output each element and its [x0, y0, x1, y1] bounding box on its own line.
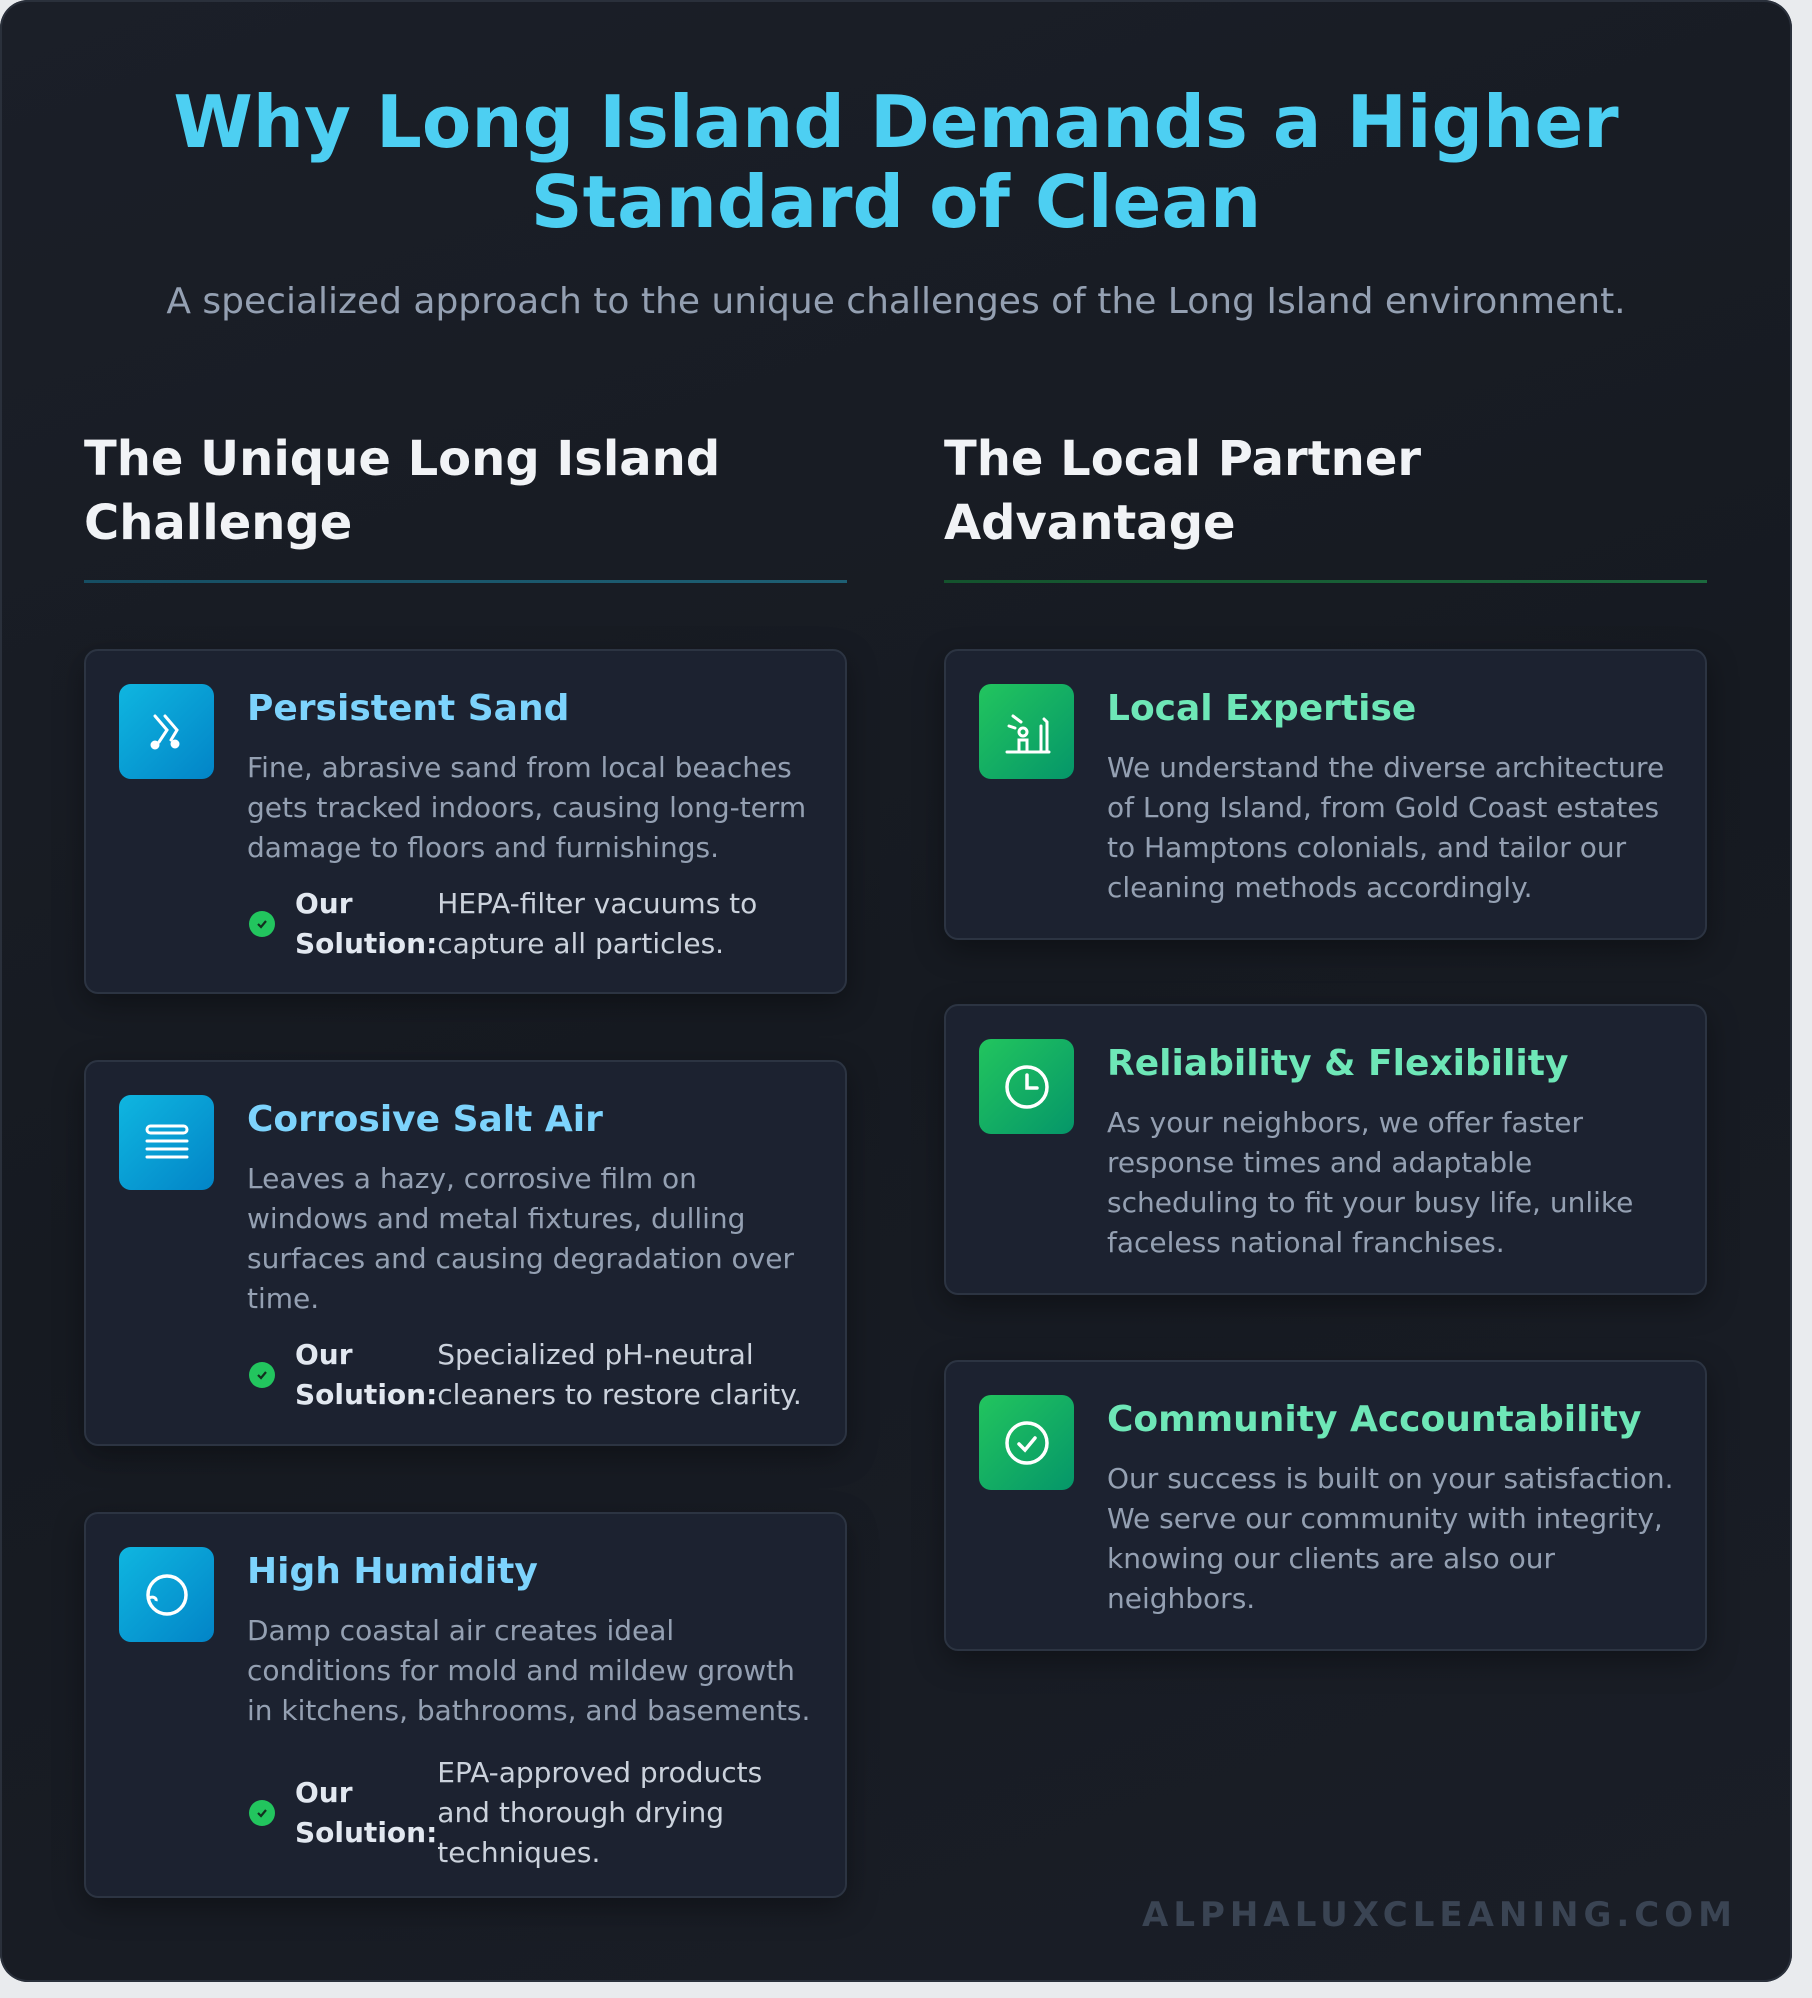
heading: challenge column: Challenge: [84, 495, 352, 551]
title: Why Long Island Demands a Higher: [173, 80, 1619, 164]
panel: local expertise: Local Expertise: [1107, 688, 1416, 729]
panel: high humidity: Damp coastal air creates ideal conditions for mold and mildew growth in kitchens, bathrooms, and basements.: [247, 1614, 810, 1727]
solution: Our Solution:: [295, 887, 437, 960]
panel: corrosive salt air: Corrosive Salt Air: [247, 1099, 603, 1140]
panel: reliability: [944, 1004, 1707, 1295]
panel: high humidity: [84, 1512, 847, 1898]
solution: Our Solution:: [295, 1776, 437, 1849]
solution: [249, 887, 757, 960]
icon: building: [979, 684, 1074, 779]
panel: local expertise: [944, 649, 1707, 940]
subtitle: A specialized approach to the unique challenges of the Long Island environment.: [166, 281, 1626, 322]
heading: advantage column: [944, 431, 1421, 551]
icon: humidity: [119, 1547, 214, 1642]
panel: reliability: As your neighbors, we offer faster response times and adaptable scheduling to fit your busy life, unlike faceless national franchises.: [1107, 1106, 1633, 1259]
heading: challenge column: The Unique Long Island: [84, 431, 720, 487]
solution: EPA-approved products and thorough drying techniques.: [437, 1756, 762, 1869]
solution: [249, 1756, 762, 1869]
panel: persistent sand: Fine, abrasive sand from local beaches gets tracked indoors, causing long-term damage to floors and furnishings.: [247, 751, 806, 864]
solution: [249, 1338, 802, 1411]
panel: reliability: Reliability & Flexibility: [1107, 1043, 1568, 1084]
panel: local expertise: We understand the diverse architecture of Long Island, from Gold Coast estates to Hamptons colonials, and tailor our cleaning methods accordingly.: [1107, 751, 1664, 904]
solution: HEPA-filter vacuums to capture all particles.: [437, 887, 757, 960]
heading: advantage column: The Local Partner: [944, 431, 1421, 487]
icon: check circle: [979, 1395, 1074, 1490]
panel: community: [944, 1360, 1707, 1651]
icon: salt air: [119, 1095, 214, 1190]
title: [173, 80, 1619, 244]
panel: corrosive salt air: Leaves a hazy, corrosive film on windows and metal fixtures, dulling surfaces and causing degradation over time.: [247, 1162, 794, 1315]
panel: community: Our success is built on your satisfaction. We serve our community with integrity, knowing our clients are also our neighbors.: [1107, 1462, 1674, 1615]
footer brand: ALPHALUXCLEANING.COM: [1142, 1895, 1737, 1935]
solution: Specialized pH-neutral cleaners to restore clarity.: [437, 1338, 802, 1411]
panel: community: Community Accountability: [1107, 1399, 1641, 1440]
panel: corrosive salt air: [84, 1060, 847, 1446]
panel: high humidity: High Humidity: [247, 1551, 538, 1592]
heading: challenge column: [84, 431, 720, 551]
heading: advantage column: Advantage: [944, 495, 1236, 551]
icon: sand: [119, 684, 214, 779]
panel: persistent sand: Persistent Sand: [247, 688, 569, 729]
title: Standard of Clean: [531, 160, 1261, 244]
solution: Our Solution:: [295, 1338, 437, 1411]
icon: clock: [979, 1039, 1074, 1134]
panel: persistent sand: [84, 649, 847, 994]
